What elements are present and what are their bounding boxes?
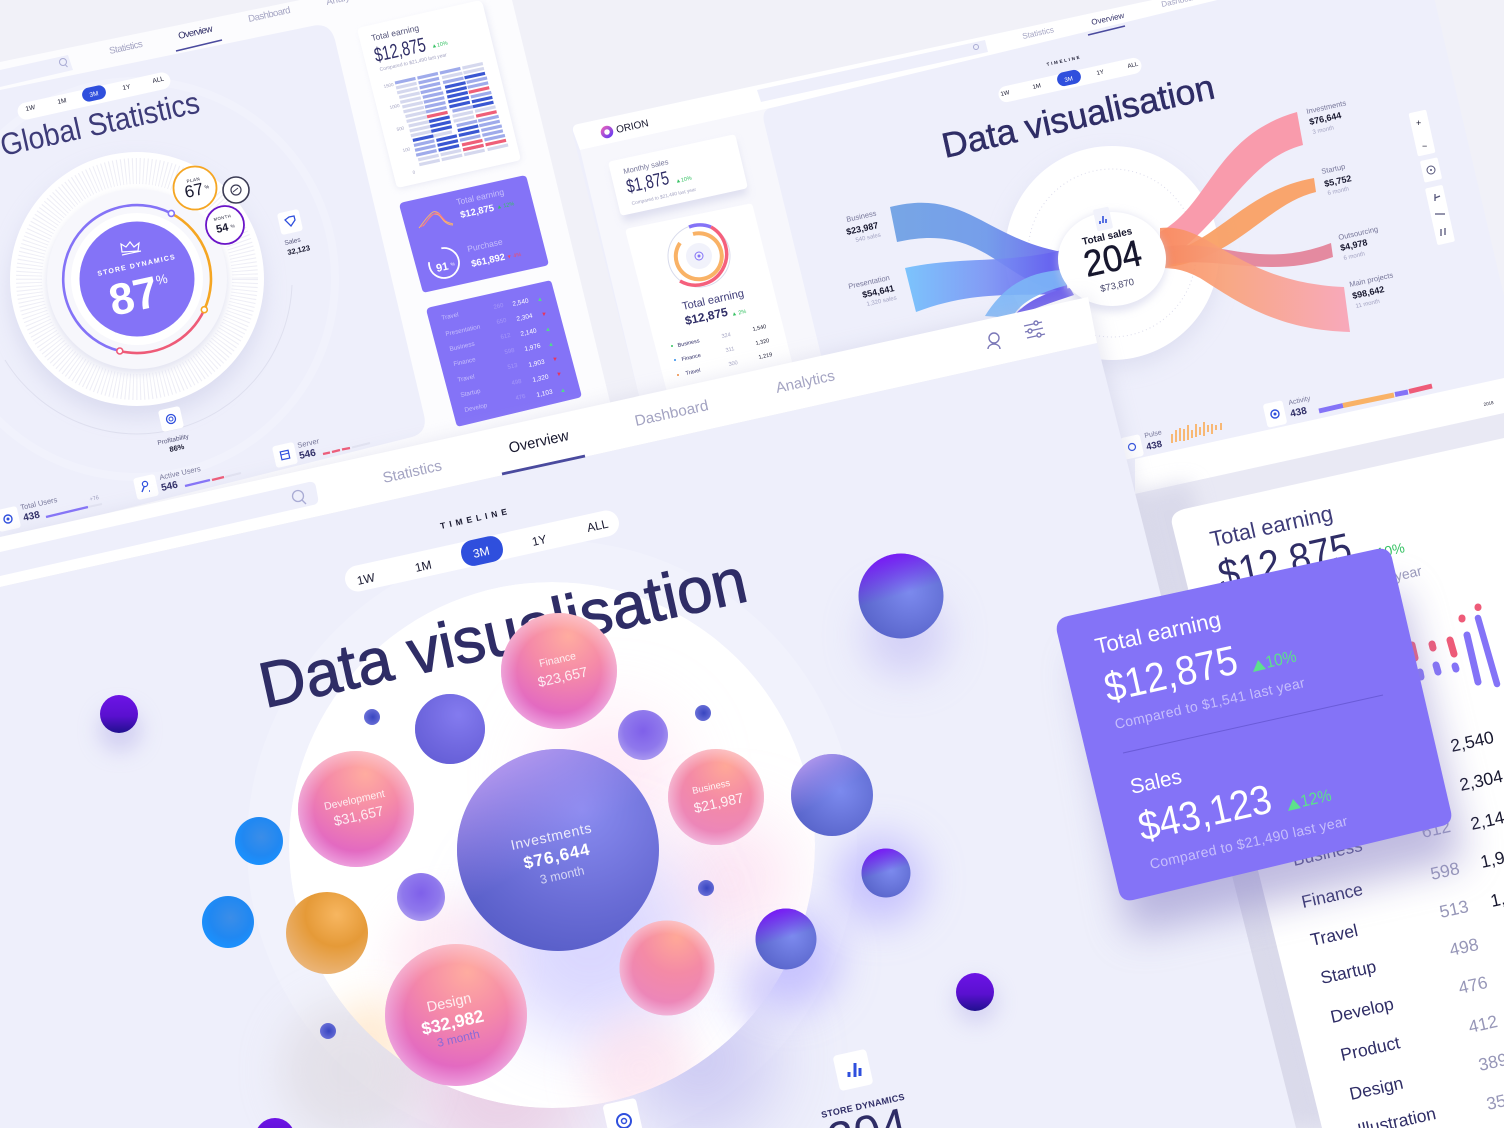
flow labels: 11 month — [1355, 299, 1380, 310]
card: total earning and sales — [1057, 549, 1465, 935]
logo: orion: ORION — [615, 118, 650, 136]
card: total earning heat chart: 1500 — [383, 82, 394, 89]
card heading: year — [1393, 562, 1424, 584]
badge: month 54%: % — [230, 223, 235, 229]
heading: data visualisation: Data visualisation — [938, 68, 1218, 166]
card: total earning and purchase: $12,875 — [459, 203, 496, 221]
table rows: Develop — [1329, 993, 1396, 1027]
zoom toolbar: − — [1422, 141, 1427, 151]
bubble: dark right — [956, 973, 994, 1011]
panel: orion data visualisation dashboard — [572, 0, 1504, 500]
backdrop glows — [98, 593, 998, 1128]
card: total earning donut: Travel — [685, 368, 701, 377]
bubble: business — [668, 749, 764, 845]
stat: server: 546 — [298, 447, 317, 462]
card: category table: 612 — [500, 333, 512, 341]
badge: month 54%: 54 — [215, 221, 230, 236]
card: total earning and sales: Compared to $1,541 last year — [1113, 674, 1306, 732]
bubble: tiny one — [364, 709, 380, 725]
card: total earning and sales: $43,123 — [1134, 776, 1276, 850]
flow labels: 6 month — [1327, 186, 1350, 197]
card heading — [1209, 509, 1421, 584]
card: total earning and sales: $12,875 — [1100, 637, 1242, 711]
icon: sliders — [1024, 321, 1045, 338]
badge: plan 67% — [174, 166, 216, 210]
timeline control: 1W — [1000, 90, 1011, 98]
flow labels: 540 sales — [855, 233, 882, 244]
flow labels: $5,752 — [1323, 173, 1352, 189]
bubble: development — [298, 751, 414, 867]
white card — [1172, 438, 1504, 1128]
circular backdrop — [1005, 146, 1219, 369]
flow labels: Investments — [1305, 98, 1347, 116]
card: total earning donut: 1,320 — [755, 338, 770, 347]
center node: total sales — [1057, 207, 1167, 312]
card: category table: Finance — [453, 356, 477, 368]
card: total earning heat chart: ▲10% — [431, 41, 449, 50]
flow labels: Business — [845, 209, 877, 224]
card: total earning donut: Finance — [681, 353, 702, 363]
card: category table: ▲ — [560, 388, 566, 394]
stat: profitability: 86% — [168, 442, 185, 454]
table rows: Product — [1339, 1032, 1402, 1065]
bubble: violet lower — [756, 908, 816, 970]
bubble: blue upper — [235, 817, 283, 865]
center disc: store dynamics: % — [154, 271, 169, 288]
card: total earning heat chart: Total earning — [370, 23, 420, 43]
timeline control: 1M — [414, 558, 433, 575]
center disc: store dynamics — [80, 222, 194, 336]
bubble: purple medium — [415, 694, 485, 764]
top nav bar — [573, 0, 1300, 150]
flow labels: 3 month — [1312, 125, 1335, 136]
bubble: top right violet — [858, 554, 944, 638]
card: category table: 650 — [496, 318, 508, 326]
bubble: tiny four — [698, 880, 714, 896]
flow labels: Main projects — [1348, 270, 1394, 289]
flow labels: 6 month — [1343, 251, 1366, 262]
card: category table: Presentation — [445, 323, 481, 338]
card heading: 10% — [1375, 539, 1406, 561]
store dynamics label: STORE DYNAMICS — [820, 1092, 905, 1120]
white bubble disc — [289, 582, 825, 1125]
timeline control — [997, 54, 1143, 104]
timeline pill: 1W — [25, 104, 37, 113]
left sidebar — [580, 107, 832, 400]
stat: sales — [277, 209, 311, 257]
card: total earning and purchase — [400, 176, 548, 292]
nav tabs: Dashboard — [633, 397, 710, 430]
flow labels: $4,978 — [1339, 237, 1368, 253]
icon: bars tile — [833, 1049, 873, 1091]
card: total earning and sales: 10% — [1264, 647, 1298, 672]
panel: global statistics dashboard — [0, 0, 612, 560]
card: total earning donut: $12,875 — [684, 305, 729, 328]
flow labels: Presentation — [847, 273, 891, 291]
bubble: tiny two — [320, 1023, 336, 1039]
badge: month 54%: MONTH — [213, 213, 232, 222]
card: category table: ▼ — [541, 312, 547, 318]
card: category table: 1,976 — [524, 343, 542, 353]
bubble: design: $32,982 — [420, 1006, 486, 1039]
timeline control: TIMELINE — [1046, 54, 1082, 67]
table rows: 2,540 — [1449, 727, 1496, 756]
nav bar — [0, 297, 1097, 587]
bubble: tiny three — [695, 705, 711, 721]
nav tabs — [108, 0, 365, 57]
flow labels: 1,320 sales — [866, 295, 897, 308]
timeline control: 1W — [356, 570, 377, 588]
timeline control: ALL — [586, 517, 610, 535]
icon: check circle — [223, 177, 249, 203]
table rows: 612 — [1420, 816, 1452, 842]
panel frame — [0, 0, 612, 560]
card heading: $12,875 — [1214, 524, 1356, 599]
bubble: investments: 3 month — [539, 863, 586, 887]
center node: total sales: Total sales — [1081, 226, 1134, 248]
timeline pill: 1M — [57, 97, 67, 106]
stat: pulse: Pulse — [1144, 429, 1163, 440]
card: total earning donut: 324 — [721, 332, 731, 340]
card: total earning and sales: Total earning — [1093, 607, 1223, 659]
flow labels: $98,642 — [1351, 284, 1385, 301]
card: category table: 1,320 — [532, 374, 550, 384]
timeline control — [343, 506, 621, 594]
stat: sales: Sales — [284, 236, 302, 247]
bubble: finance: $23,657 — [536, 663, 589, 690]
card: total earning heat chart: Compared to $21,490 last year — [379, 52, 448, 73]
timeline pill — [16, 71, 172, 121]
card: total earning heat chart: 0 — [412, 169, 416, 175]
zoom toolbar — [1408, 110, 1455, 245]
card: total earning heat chart: 500 — [396, 125, 405, 132]
timeline control: 1Y — [531, 532, 548, 549]
flow labels — [845, 98, 1394, 310]
card: total earning donut: Total earning — [681, 288, 745, 313]
card: total earning and purchase: Total earning — [455, 187, 505, 207]
card: total earning and purchase: ▲ 12% — [496, 201, 515, 211]
flow labels: $76,644 — [1308, 110, 1342, 127]
card: total earning and sales: Sales — [1128, 765, 1184, 799]
icon: target tile — [602, 1098, 644, 1128]
bubble: finance — [501, 613, 617, 729]
panel body — [0, 343, 1296, 1128]
card: monthly sales: Monthly sales — [622, 157, 669, 176]
table rows: 513 — [1438, 896, 1470, 922]
card: total earning heat chart: $12,875 — [372, 34, 428, 67]
stat: pulse: 438 — [1145, 439, 1163, 453]
timeline control: 1M — [1032, 83, 1042, 91]
nav tabs: Overview — [177, 24, 214, 42]
card: category table: Business — [449, 341, 475, 353]
card: total earning and sales: 12% — [1299, 786, 1333, 811]
bubble: investments: Investments — [509, 820, 593, 853]
card: category table: 476 — [515, 394, 527, 402]
card: total earning donut: ▲ 2% — [731, 309, 747, 318]
card: total earning donut: 1,219 — [758, 352, 773, 361]
card: total earning donut: 311 — [725, 346, 735, 354]
badge: plan 67%: 67 — [183, 179, 205, 202]
table rows: Finance — [1300, 879, 1365, 912]
stat: profitability — [157, 406, 190, 454]
panel: main bubble dashboard — [0, 297, 1296, 1128]
card: total earning donut: Business — [677, 338, 700, 349]
center node: total sales: 204 — [1080, 232, 1145, 285]
card: monthly sales: Compared to $21,490 last year — [631, 187, 697, 207]
card: total earning donut — [626, 204, 794, 396]
timeline pill: 3M — [89, 90, 99, 99]
donut chart — [668, 225, 730, 287]
nav tabs: Statistics — [108, 39, 144, 57]
stat: active users: Active Users — [158, 464, 202, 482]
bubble: design: Design — [425, 991, 473, 1016]
card: category table: Travel — [457, 373, 475, 384]
nav tabs: Statistics — [1021, 25, 1055, 41]
timeline control: 3M — [1064, 76, 1074, 84]
search box — [0, 482, 318, 576]
bubble: dark left — [100, 695, 138, 733]
stat: total users: 438 — [22, 509, 41, 524]
card: category table: ▲ — [548, 342, 554, 348]
stat: sales: 32,123 — [286, 243, 311, 257]
table rows: 498 — [1448, 934, 1480, 960]
bubble: investments: $76,644 — [522, 840, 592, 873]
stat: server: Server — [296, 436, 320, 450]
card: category table: ▲ — [545, 327, 551, 333]
bubble: lavender blue — [791, 754, 873, 836]
timeline control: ALL — [1127, 62, 1140, 70]
nav tabs: Dashboard — [247, 5, 292, 25]
bubble: blue lower — [202, 896, 254, 948]
nav tabs — [1021, 0, 1201, 41]
timeline control: 3M — [472, 544, 491, 561]
inner panel — [0, 25, 425, 540]
card: category table: Startup — [460, 388, 482, 399]
card: total earning and sales: Compared to $21,490 last year — [1148, 813, 1349, 872]
stat: pulse — [1120, 422, 1221, 460]
table rows: 598 — [1429, 858, 1461, 884]
bubble: small purple — [618, 710, 668, 760]
badge: plan 67%: PLAN — [186, 176, 201, 184]
bubble: business: Business — [691, 778, 732, 797]
table rows: Startup — [1319, 956, 1378, 988]
card: category table: ▼ — [556, 372, 562, 378]
progress ring — [63, 205, 211, 354]
card: total earning donut: 300 — [728, 360, 738, 368]
stat: profitability: Profitability — [157, 433, 190, 447]
stat: activity — [1263, 386, 1432, 428]
card: category table: 2,304 — [516, 313, 534, 323]
bubble: investments — [457, 749, 659, 951]
card: category table: Develop — [464, 402, 488, 414]
heading: data visualisation: Data visualisation — [252, 544, 753, 722]
card: category table: 2,140 — [520, 328, 538, 338]
bubble: development: $31,657 — [332, 802, 385, 829]
nav: search box — [0, 55, 73, 87]
card: category table: 498 — [511, 379, 523, 387]
nav tabs — [381, 367, 836, 487]
nav tabs: Analytics — [774, 367, 836, 397]
stat: activity: Activity — [1288, 395, 1312, 407]
bubble: orange — [286, 892, 368, 974]
card: category table: ▼ — [552, 357, 558, 363]
card heading: Total earning — [1208, 500, 1335, 552]
nav tabs: Statistics — [381, 457, 443, 487]
card: monthly sales: ▲10% — [675, 176, 693, 185]
timeline pill: 1Y — [122, 83, 132, 92]
flow labels: $54,641 — [861, 283, 895, 300]
table rows: 412 — [1467, 1011, 1499, 1037]
card: category table: 2,540 — [512, 298, 530, 308]
sankey flows: left — [890, 203, 1074, 318]
center disc: store dynamics: 87 — [105, 267, 163, 326]
card: total earning and purchase: $61,892 — [470, 252, 506, 270]
card: category table: Travel — [441, 311, 459, 322]
stat: total users: Total Users — [19, 495, 58, 512]
card: category table: 260 — [493, 303, 505, 311]
bubble: design — [385, 944, 527, 1086]
card: category table: 513 — [507, 363, 519, 371]
footer strip — [1135, 378, 1504, 494]
sankey flows: right — [1160, 112, 1350, 332]
bubble: small purple lower — [397, 873, 445, 921]
bubble: pink unlabeled — [620, 920, 714, 1016]
bubble: finance: Finance — [538, 650, 577, 670]
stat: activity: 438 — [1289, 405, 1308, 420]
table rows — [1291, 727, 1504, 1128]
flow labels: $23,987 — [845, 220, 879, 237]
heading: Global Statistics: Global Statistics — [0, 85, 203, 163]
card: monthly sales: $1,875 — [625, 168, 671, 198]
bubble: violet right — [862, 848, 910, 898]
badge: plan 67%: % — [204, 184, 210, 191]
year label: 2018 — [1483, 400, 1494, 407]
nav tabs: Overview — [507, 427, 571, 457]
table backdrop — [1191, 413, 1504, 482]
stat: total users: +76 — [89, 495, 100, 503]
stat: active users — [133, 464, 241, 500]
center node: total sales: $73,870 — [1099, 277, 1135, 295]
outer dial — [5, 152, 292, 434]
card: total earning heat chart: 1000 — [389, 103, 400, 110]
card: category table: ▲ — [537, 297, 543, 303]
table rows: 2,304 — [1458, 766, 1504, 795]
bubble: design: 3 month — [436, 1027, 481, 1050]
card: total earning heat chart: 100 — [402, 146, 411, 153]
card: total earning heat chart — [358, 1, 520, 188]
zoom toolbar: + — [1416, 118, 1421, 128]
stat: server — [272, 436, 370, 468]
nav tabs: Overview — [1090, 11, 1125, 27]
card: category table: 1,903 — [528, 359, 546, 369]
icon: user — [988, 333, 1000, 349]
bubble: development: Development — [323, 788, 386, 813]
timeline control: TIMELINE — [439, 506, 508, 531]
timeline control: 1Y — [1096, 70, 1105, 77]
card: category table: 1,103 — [536, 389, 554, 399]
table rows: Travel — [1309, 920, 1360, 950]
timeline pill: ALL — [152, 76, 165, 85]
center disc: store dynamics: STORE DYNAMICS — [97, 254, 177, 278]
card: category table — [427, 281, 581, 426]
flow labels: Startup — [1320, 162, 1346, 176]
table rows: Business — [1291, 835, 1364, 870]
search box — [757, 40, 988, 102]
panel: lower right table — [1135, 413, 1504, 1128]
card: category table: 598 — [504, 348, 516, 356]
bar chart — [1412, 607, 1497, 684]
card: total earning and purchase: Purchase — [466, 236, 504, 254]
table rows: 476 — [1457, 972, 1489, 998]
panel frame — [572, 0, 1504, 500]
bubble: business: $21,987 — [692, 789, 745, 816]
badge: month 54% — [206, 206, 244, 244]
bubble: dark bottom — [255, 1118, 295, 1128]
card: total earning and purchase: 91 — [435, 261, 450, 275]
panel shadow — [0, 297, 1296, 1128]
card: total earning and purchase: % — [450, 261, 455, 267]
card: total earning donut: 1,540 — [752, 324, 767, 333]
table rows: Design — [1348, 1073, 1405, 1104]
card: monthly sales — [609, 135, 748, 222]
card: total earning and purchase: ▼ 4% — [506, 252, 522, 261]
stat: total users — [0, 495, 102, 532]
flow labels: Outsourcing — [1337, 224, 1379, 242]
stat: active users: 546 — [160, 479, 179, 494]
